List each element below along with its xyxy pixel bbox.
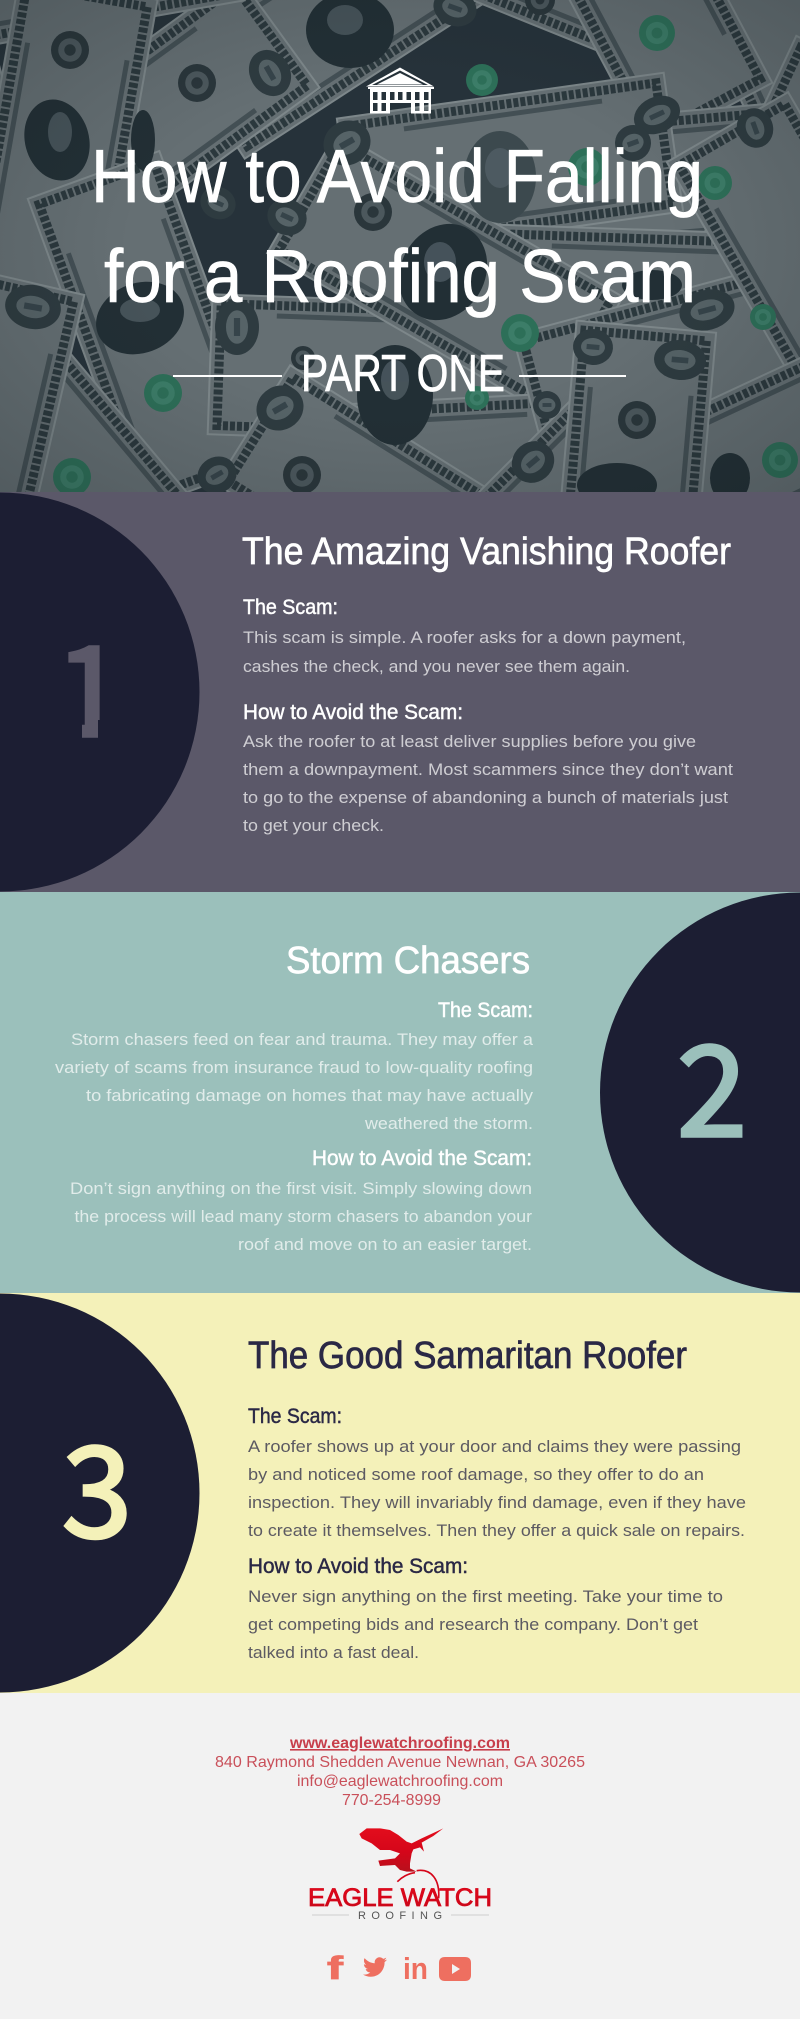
contact details: www.eaglewatchroofing.com	[289, 1735, 510, 1752]
text block: how to avoid 1	[243, 701, 733, 835]
text block: how to avoid 2	[70, 1147, 532, 1254]
title: for a Roofing Scam	[104, 234, 696, 318]
money background	[0, 0, 800, 492]
icon: facebook: f	[327, 1950, 344, 1986]
contact details: info@eaglewatchroofing.com	[297, 1773, 503, 1790]
text block: the scam 3: to create it themselves. Then they offer a quick sale on repairs.	[248, 1521, 745, 1540]
contact details: 840 Raymond Shedden Avenue Newnan, GA 30265	[215, 1754, 585, 1771]
heading 1: The Amazing Vanishing Roofer	[242, 531, 731, 573]
number circle 2	[600, 892, 800, 1292]
heading 3: The Good Samaritan Roofer	[248, 1335, 687, 1377]
text block: the scam 2: to fabricating damage on homes that may have actually	[86, 1086, 534, 1105]
social icons	[327, 1950, 471, 1986]
text block: the scam 1: cashes the check, and you never see them again.	[243, 657, 630, 676]
text block: how to avoid 3: Never sign anything on the first meeting. Take your time to	[248, 1587, 723, 1606]
text block: how to avoid 1: them a downpayment. Most scammers since they don’t want	[243, 760, 733, 779]
text block: how to avoid 1: to get your check.	[243, 816, 384, 835]
contact details	[215, 1735, 585, 1809]
text block: the scam 3: inspection. They will invariably find damage, even if they have	[248, 1493, 746, 1512]
title: How to Avoid Falling	[91, 134, 703, 218]
text block: how to avoid 1: to go to the expense of abandoning a bunch of materials just	[243, 788, 728, 807]
logo: eagle watch roofing	[308, 1828, 492, 1922]
icon: linkedin: in	[403, 1951, 428, 1986]
text block: how to avoid 2: How to Avoid the Scam:	[312, 1147, 532, 1170]
hero panel	[0, 0, 800, 492]
panel: footer	[0, 1693, 800, 2019]
text block: how to avoid 2: roof and move on to an easier target.	[238, 1235, 532, 1254]
text block: the scam 2: The Scam:	[438, 999, 533, 1022]
text block: how to avoid 1: How to Avoid the Scam:	[243, 701, 463, 724]
text block: the scam 3: A roofer shows up at your door and claims they were passing	[248, 1437, 741, 1456]
number circle 3	[0, 1294, 200, 1692]
panel: section 2	[0, 892, 800, 1293]
text block: the scam 3: by and noticed some roof damage, so they offer to do an	[248, 1465, 704, 1484]
text block: how to avoid 2: Don’t sign anything on the first visit. Simply slowing down	[70, 1179, 532, 1198]
text block: the scam 1: This scam is simple. A roofer asks for a down payment,	[243, 628, 686, 647]
text block: the scam 2: Storm chasers feed on fear and trauma. They may offer a	[71, 1030, 534, 1049]
text block: how to avoid 1: Ask the roofer to at least deliver supplies before you give	[243, 732, 696, 751]
heading 2: Storm Chasers	[286, 940, 530, 982]
icon: eagle	[359, 1828, 443, 1898]
logo wordmark: EAGLE WATCH	[308, 1884, 492, 1912]
icon: building	[366, 68, 434, 114]
number circle 1	[0, 492, 200, 892]
text block: the scam 2: weathered the storm.	[364, 1114, 533, 1133]
text block: how to avoid 2: the process will lead many storm chasers to abandon your	[74, 1207, 532, 1226]
title	[91, 134, 703, 318]
text block: how to avoid 3: How to Avoid the Scam:	[248, 1555, 468, 1578]
number circle 3: 3	[62, 1392, 132, 1573]
number circle 1: 1	[55, 591, 124, 772]
panel: section 1	[0, 492, 800, 892]
logo tagline: ROOFING	[358, 1910, 442, 1922]
text block: the scam 2: variety of scams from insurance fraud to low-quality roofing	[55, 1058, 533, 1077]
text block: the scam 3	[248, 1405, 746, 1540]
text block: how to avoid 3: get competing bids and research the company. Don’t get	[248, 1615, 698, 1634]
text block: the scam 1: The Scam:	[243, 596, 338, 619]
number circle 2: 2	[677, 991, 747, 1172]
text block: the scam 1	[243, 596, 686, 676]
subtitle: part one: PART ONE	[301, 345, 505, 403]
text block: how to avoid 3: talked into a fast deal.	[248, 1643, 419, 1662]
text block: the scam 3: The Scam:	[248, 1405, 342, 1428]
contact details: 770-254-8999	[342, 1792, 441, 1809]
icon: youtube	[439, 1957, 471, 1981]
icon: twitter	[363, 1957, 387, 1977]
text block: how to avoid 3	[248, 1555, 723, 1662]
panel: section 3	[0, 1293, 800, 1693]
text block: the scam 2	[55, 999, 534, 1133]
